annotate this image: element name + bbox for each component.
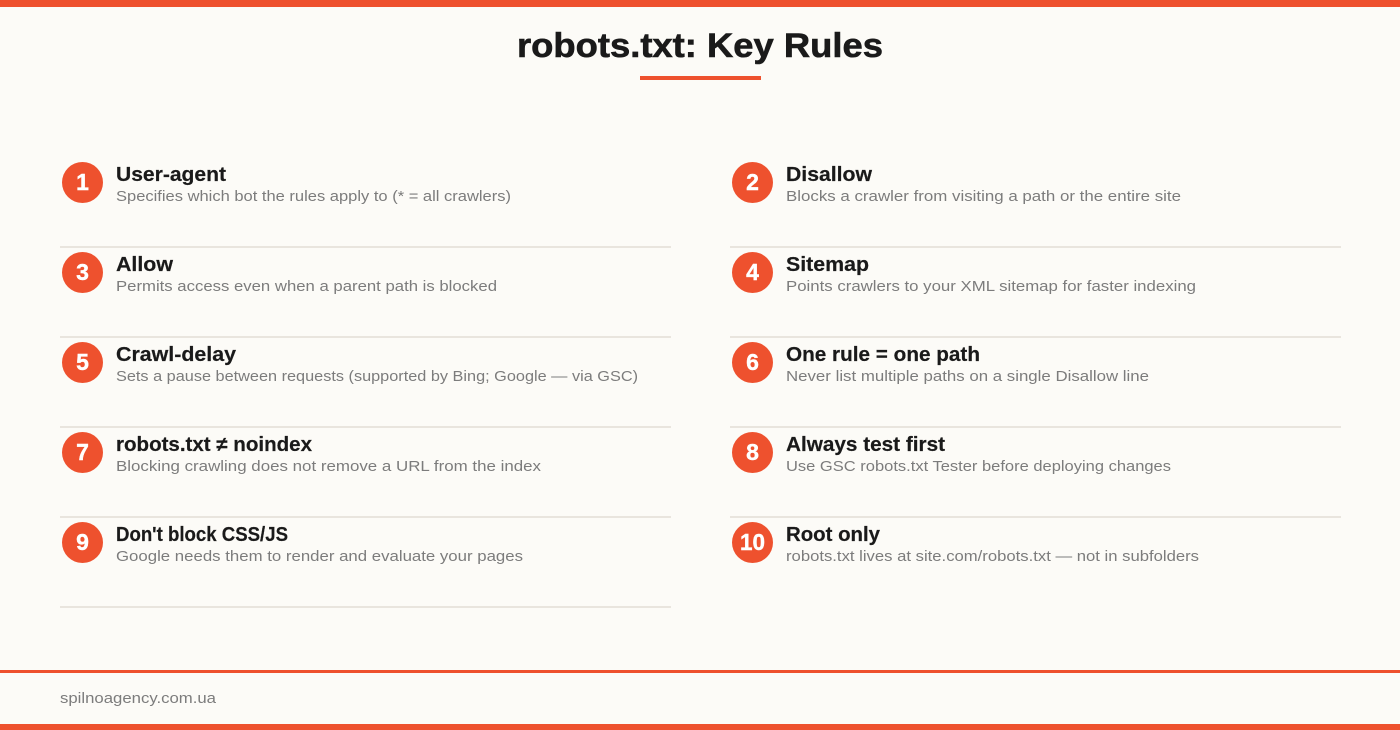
rule 3: Allow <box>62 252 497 295</box>
heading: Don't block CSS/JS: Don't block CSS/JS <box>116 524 288 546</box>
heading: Disallow: Disallow <box>786 164 872 186</box>
number badge 7: 7 <box>76 439 89 465</box>
number badge 1: 1 <box>76 169 89 195</box>
bottom accent bar <box>0 724 1400 730</box>
description: Sitemap: Points crawlers to your XML sitemap for faster indexing <box>786 278 1196 295</box>
footer rule <box>0 670 1400 673</box>
heading: Crawl-delay: Crawl-delay <box>116 344 237 366</box>
rule 8: Always test first <box>732 432 1171 475</box>
rule 4: Sitemap <box>732 252 1196 295</box>
description: User-agent: Specifies which bot the rules apply to (* = all crawlers) <box>116 188 511 205</box>
number badge 2: 2 <box>746 169 759 195</box>
number badge 10: 10 <box>740 529 765 555</box>
number badge 8 <box>732 432 773 473</box>
heading: Always test first: Always test first <box>786 434 945 456</box>
heading: User-agent: User-agent <box>116 164 226 186</box>
number badge 9 <box>62 522 103 563</box>
number badge 2 <box>732 162 773 203</box>
heading: Root only: Root only <box>786 524 881 546</box>
number badge 1 <box>62 162 103 203</box>
description: Root only: robots.txt lives at site.com/robots.txt — not in subfolders <box>786 548 1199 565</box>
heading: Sitemap: Sitemap <box>786 254 869 276</box>
number badge 6: 6 <box>746 349 759 375</box>
top accent bar <box>0 0 1400 7</box>
number badge 5 <box>62 342 103 383</box>
number badge 6 <box>732 342 773 383</box>
number badge 4: 4 <box>746 259 759 285</box>
rule 7: robots.txt ≠ noindex <box>62 432 542 475</box>
footer text: spilnoagency.com.ua <box>60 690 217 707</box>
rule 5: Crawl-delay <box>62 342 638 385</box>
heading: One rule = one path: One rule = one path <box>786 344 980 366</box>
rule 9: Don't block CSS/JS <box>62 522 523 565</box>
title: robots.txt: Key Rules <box>517 27 883 65</box>
number badge 9: 9 <box>76 529 89 555</box>
title underline <box>640 76 761 80</box>
description: robots.txt ≠ noindex: Blocking crawling does not remove a URL from the index <box>116 458 542 475</box>
number badge 5: 5 <box>76 349 89 375</box>
rule 1: User-agent <box>62 162 511 205</box>
description: Don't block CSS/JS: Google needs them to render and evaluate your pages <box>116 548 523 565</box>
description: Allow: Permits access even when a parent path is blocked <box>116 278 497 295</box>
number badge 3 <box>62 252 103 293</box>
description: Always test first: Use GSC robots.txt Tester before deploying changes <box>786 458 1171 475</box>
number badge 8: 8 <box>746 439 759 465</box>
description: Crawl-delay: Sets a pause between requests (supported by Bing; Google — via GSC) <box>116 368 638 385</box>
rule 6: One rule = one path <box>732 342 1149 385</box>
description: Disallow: Blocks a crawler from visiting a path or the entire site <box>786 188 1181 205</box>
rule 10: Root only <box>732 522 1199 565</box>
heading: Allow: Allow <box>116 254 173 276</box>
number badge 4 <box>732 252 773 293</box>
number badge 3: 3 <box>76 259 89 285</box>
description: One rule = one path: Never list multiple paths on a single Disallow line <box>786 368 1149 385</box>
number badge 10 <box>732 522 773 563</box>
heading: robots.txt ≠ noindex: robots.txt ≠ noindex <box>116 434 312 456</box>
number badge 7 <box>62 432 103 473</box>
rule 2: Disallow <box>732 162 1181 205</box>
